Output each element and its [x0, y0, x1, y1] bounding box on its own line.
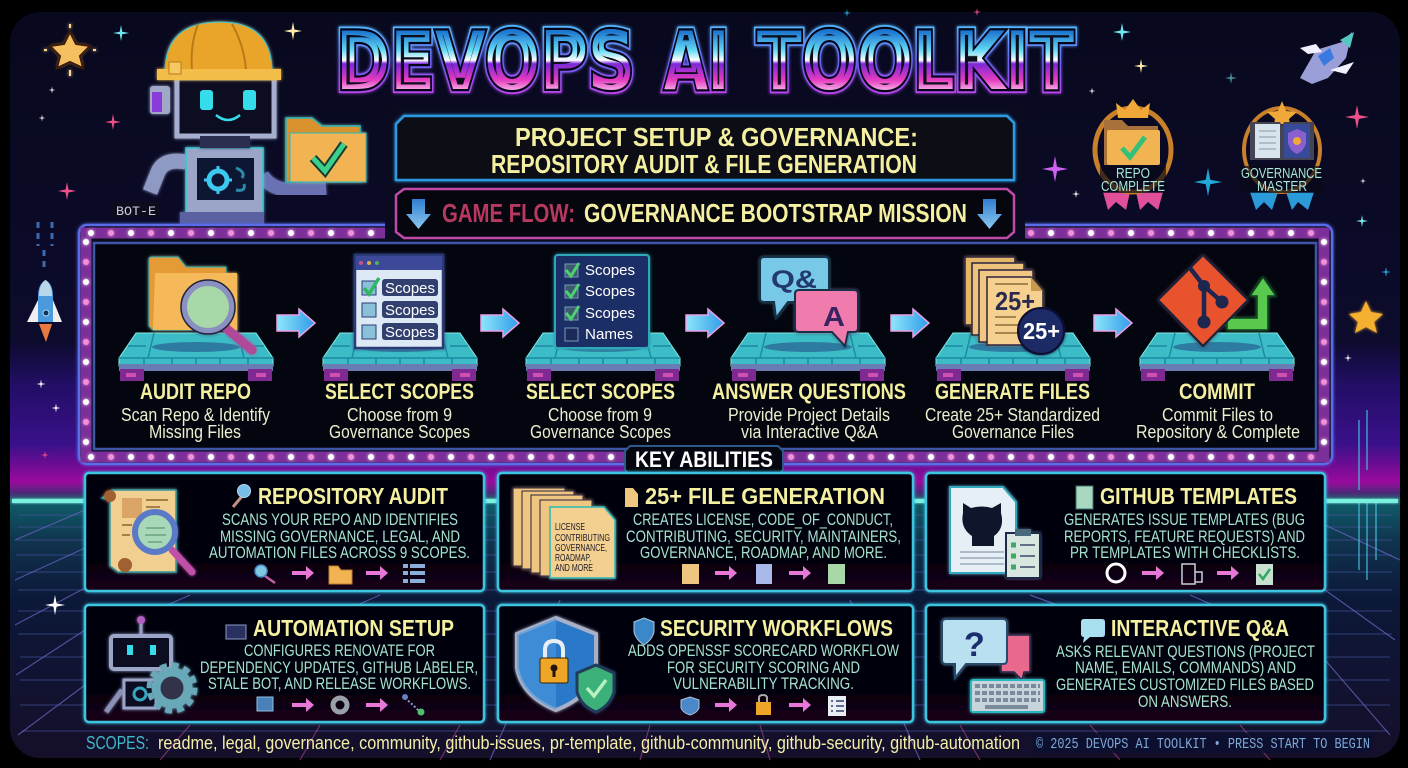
- heading with robot icon: AUTOMATION SETUP: [253, 615, 454, 641]
- arrow 4: [891, 309, 929, 337]
- robot arm right: [262, 175, 326, 190]
- description: STALE BOT, AND RELEASE WORKFLOWS.: [208, 675, 471, 693]
- title outline layer: DEVOPS: [336, 15, 635, 108]
- heading: AUDIT REPO: [140, 379, 251, 404]
- description: Scan Repo & Identify: [121, 405, 270, 425]
- description: [1136, 405, 1300, 442]
- badge label: MASTER: [1257, 178, 1307, 195]
- icon: scopes window: Scopes: [385, 324, 435, 341]
- description: via Interactive Q&A: [741, 422, 878, 442]
- description: [209, 511, 470, 562]
- description: MISSING GOVERNANCE, LEGAL, AND: [220, 528, 460, 546]
- description: SCANS YOUR REPO AND IDENTIFIES: [222, 511, 458, 529]
- description: GOVERNANCE, ROADMAP, AND MORE.: [640, 544, 887, 562]
- description: Provide Project Details: [728, 405, 890, 425]
- platform: [731, 333, 885, 381]
- title outline layer: AI: [664, 15, 729, 108]
- robot mascot BOT-E: [112, 22, 366, 224]
- heading with shield icon: [634, 615, 893, 645]
- decorative stars: [36, 8, 1391, 615]
- icon: scopes window: Scopes: [385, 280, 435, 297]
- description: [925, 405, 1100, 442]
- mini flow icons: [1107, 564, 1273, 585]
- platform: [323, 333, 477, 381]
- title dark gap: [336, 15, 1074, 108]
- description: [530, 405, 671, 442]
- step 4: answer questions: [712, 257, 906, 442]
- step 6: commit: [1136, 255, 1300, 442]
- description: [626, 511, 901, 562]
- platform: [936, 333, 1090, 381]
- banner frame: [396, 189, 1014, 238]
- description: [628, 642, 899, 693]
- description: Governance Scopes: [329, 422, 470, 442]
- heading: SELECT SCOPES: [526, 379, 675, 404]
- icon: scopes checklist: Scopes: [585, 283, 635, 300]
- icon: book medal: [1244, 101, 1320, 210]
- icon: medal: [1095, 99, 1171, 210]
- footer: scopes list: SCOPES:: [86, 733, 149, 753]
- heading: COMMIT: [1179, 379, 1255, 404]
- subtitle panel: [385, 108, 1025, 240]
- description: REPORTS, FEATURE REQUESTS) AND: [1064, 528, 1305, 546]
- robot body: [180, 148, 264, 224]
- card frame: [498, 473, 913, 591]
- description: Governance Files: [952, 422, 1074, 442]
- card frame: [926, 605, 1325, 722]
- icon: gold star right: [1349, 301, 1383, 333]
- icon: scopes window: [355, 255, 443, 348]
- description: [200, 642, 478, 693]
- description: ADDS OPENSSF SCORECARD WORKFLOW: [628, 642, 899, 660]
- icon: file stack: CONTRIBUTING: [555, 533, 610, 544]
- icon: down arrow left: [406, 199, 431, 229]
- description: Choose from 9: [347, 405, 452, 425]
- platform: [526, 333, 680, 381]
- description: [121, 405, 270, 442]
- card: automation setup: [85, 605, 484, 722]
- title chrome letters: DEVOPS: [336, 15, 635, 108]
- description: ASKS RELEVANT QUESTIONS (PROJECT: [1056, 643, 1315, 661]
- arrow 3: [686, 309, 724, 337]
- heading: GENERATE FILES: [935, 379, 1090, 404]
- arrow 1: [277, 309, 315, 337]
- icon: gold star top left: [44, 24, 96, 76]
- icon: file stack: GOVERNANCE,: [555, 543, 607, 554]
- description: AUTOMATION FILES ACROSS 9 SCOPES.: [209, 544, 470, 562]
- badge label: COMPLETE: [1101, 178, 1165, 195]
- title chrome letters: TOOLKIT: [757, 15, 1074, 108]
- icon: scopes window: Scopes: [385, 302, 435, 319]
- icon: file stack with 25+ badge: 25+: [1023, 318, 1060, 344]
- icon: rocket left: [27, 222, 62, 342]
- heading with chat icon: INTERACTIVE Q&A: [1111, 615, 1289, 641]
- icon: scopes checklist: Names: [585, 326, 633, 343]
- description: [728, 405, 890, 442]
- badge: governance master: [1240, 101, 1323, 210]
- game flow banner: [396, 189, 1014, 238]
- icon: spaceship top right: [1300, 32, 1354, 84]
- icon: question bubbles and keyboard: [942, 619, 1044, 712]
- icon: scopes checklist: Scopes: [585, 305, 635, 322]
- title chrome letters: AI: [664, 15, 729, 108]
- step 1: audit repo: [119, 257, 273, 442]
- title: [336, 15, 1074, 108]
- frame outer neon border: [79, 225, 1332, 464]
- subtitle text: [491, 124, 918, 179]
- description: CONFIGURES RENOVATE FOR: [244, 642, 435, 660]
- icon: file stack: ROADMAP,: [555, 553, 591, 564]
- heading with magnifier icon: REPOSITORY AUDIT: [258, 483, 448, 509]
- icon: file stack with 25+ badge: 25+: [995, 286, 1035, 316]
- icon: Q and A bubbles: Q&: [771, 266, 817, 294]
- platform: [119, 333, 273, 381]
- robot name tag: BOT-E: [116, 204, 156, 219]
- mini flow icons: [682, 564, 845, 584]
- mini flow icons: [681, 695, 846, 716]
- marquee lights: [86, 233, 1324, 457]
- robot hard hat: [157, 22, 281, 80]
- icon: down arrow right: [977, 199, 1002, 229]
- title dark gap: TOOLKIT: [757, 15, 1074, 108]
- arrow 2: [481, 309, 519, 337]
- description: Repository & Complete: [1136, 422, 1300, 442]
- description: [329, 405, 470, 442]
- robot head: [150, 78, 274, 148]
- heading with file icon: 25+ FILE GENERATION: [645, 483, 885, 509]
- badge: repo complete: [1095, 99, 1171, 210]
- horizon glow line: [12, 499, 1398, 503]
- platform: [1140, 333, 1294, 381]
- description: FOR SECURITY SCORING AND: [667, 659, 860, 677]
- icon: shield with padlock: [517, 618, 614, 712]
- icon: robot with gear: [106, 616, 195, 712]
- description: GENERATES ISSUE TEMPLATES (BUG: [1064, 511, 1305, 529]
- description: GENERATES CUSTOMIZED FILES BASED: [1056, 676, 1314, 694]
- description: DEPENDENCY UPDATES, GITHUB LABELER,: [200, 659, 478, 677]
- card: repository audit: [85, 473, 484, 591]
- description: [1056, 643, 1315, 711]
- description: Create 25+ Standardized: [925, 405, 1100, 425]
- icon: file stack with 25+ badge: [965, 257, 1064, 354]
- card frame: [85, 473, 484, 591]
- card frame: [498, 605, 913, 722]
- step 2: select scopes window: [323, 255, 477, 442]
- step 5: generate files: [925, 257, 1100, 442]
- description: ON ANSWERS.: [1138, 693, 1232, 711]
- heading with clipboard icon: GITHUB TEMPLATES: [1100, 483, 1297, 509]
- frame inner panel: [94, 243, 1316, 449]
- heading with shield icon: SECURITY WORKFLOWS: [660, 615, 893, 641]
- card frame: [926, 473, 1325, 591]
- footer: scopes list: readme, legal, governance, community, github-issues, pr-template, github-community, github-security, github-automation: [158, 733, 1020, 753]
- card: security workflows: [498, 605, 913, 722]
- icon: Q and A bubbles: A: [823, 301, 845, 332]
- description: NAME, EMAILS, COMMANDS) AND: [1075, 659, 1296, 677]
- icon: folder and magnifier: [149, 257, 252, 350]
- description: Governance Scopes: [530, 422, 671, 442]
- icon: scopes checklist: [555, 255, 649, 348]
- badge label: REPO: [1116, 165, 1150, 182]
- subtitle frame: [396, 116, 1014, 180]
- card: interactive Q&A: [926, 605, 1325, 722]
- title outline layer: TOOLKIT: [757, 15, 1074, 108]
- icon: document with octocat and clipboard: [950, 487, 1040, 578]
- badge label: GOVERNANCE: [1241, 165, 1322, 182]
- icon: folder with check: [286, 118, 366, 182]
- description: Choose from 9: [548, 405, 652, 425]
- step 3: select scopes checklist: [526, 255, 680, 442]
- marquee strip: [86, 233, 1324, 457]
- arrow 5: [1094, 309, 1132, 337]
- badge label: [1100, 165, 1166, 195]
- mission name: GOVERNANCE BOOTSTRAP MISSION: [584, 198, 967, 228]
- mini flow icons: [257, 694, 424, 716]
- key abilities label: KEY ABILITIES: [635, 447, 773, 472]
- title dark gap: AI: [664, 15, 729, 108]
- heading: ANSWER QUESTIONS: [712, 379, 906, 404]
- icon: Q and A bubbles: [760, 257, 858, 346]
- icon: file stack: LICENSE: [555, 522, 585, 533]
- card: 25+ file generation: [498, 473, 913, 591]
- panel: main game flow frame with marquee lights: [79, 225, 1332, 464]
- description: CONTRIBUTING, SECURITY, MAINTAINERS,: [626, 528, 901, 546]
- game flow label: GAME FLOW:: [442, 198, 575, 228]
- card: github templates: [926, 473, 1325, 591]
- badge label: [1240, 165, 1323, 195]
- icon: question bubbles and keyboard: ?: [964, 626, 985, 664]
- heading: SELECT SCOPES: [325, 379, 474, 404]
- icon: git logo with green arrow: [1158, 255, 1276, 346]
- heading with chat icon: [1081, 615, 1289, 643]
- subtitle text: REPOSITORY AUDIT & FILE GENERATION: [491, 151, 917, 179]
- description: Commit Files to: [1162, 405, 1273, 425]
- description: Missing Files: [149, 422, 241, 442]
- mini flow icons: [255, 565, 425, 584]
- description: PR TEMPLATES WITH CHECKLISTS.: [1070, 544, 1300, 562]
- robot arm left: [150, 161, 186, 192]
- icon: scopes checklist: Scopes: [585, 262, 635, 279]
- description: [1064, 511, 1305, 562]
- description: VULNERABILITY TRACKING.: [673, 675, 854, 693]
- title chrome letters: [336, 15, 1074, 108]
- background: perspective grid floor: [15, 410, 1400, 760]
- title outline layer: [336, 15, 1074, 108]
- title dark gap: DEVOPS: [336, 15, 635, 108]
- subtitle text: PROJECT SETUP & GOVERNANCE:: [515, 124, 918, 152]
- card frame: [85, 605, 484, 722]
- icon: scroll and magnifier: [102, 490, 192, 572]
- icon: file stack: [513, 488, 615, 578]
- icon: file stack: AND MORE: [555, 563, 593, 574]
- description: CREATES LICENSE, CODE_OF_CONDUCT,: [633, 511, 893, 529]
